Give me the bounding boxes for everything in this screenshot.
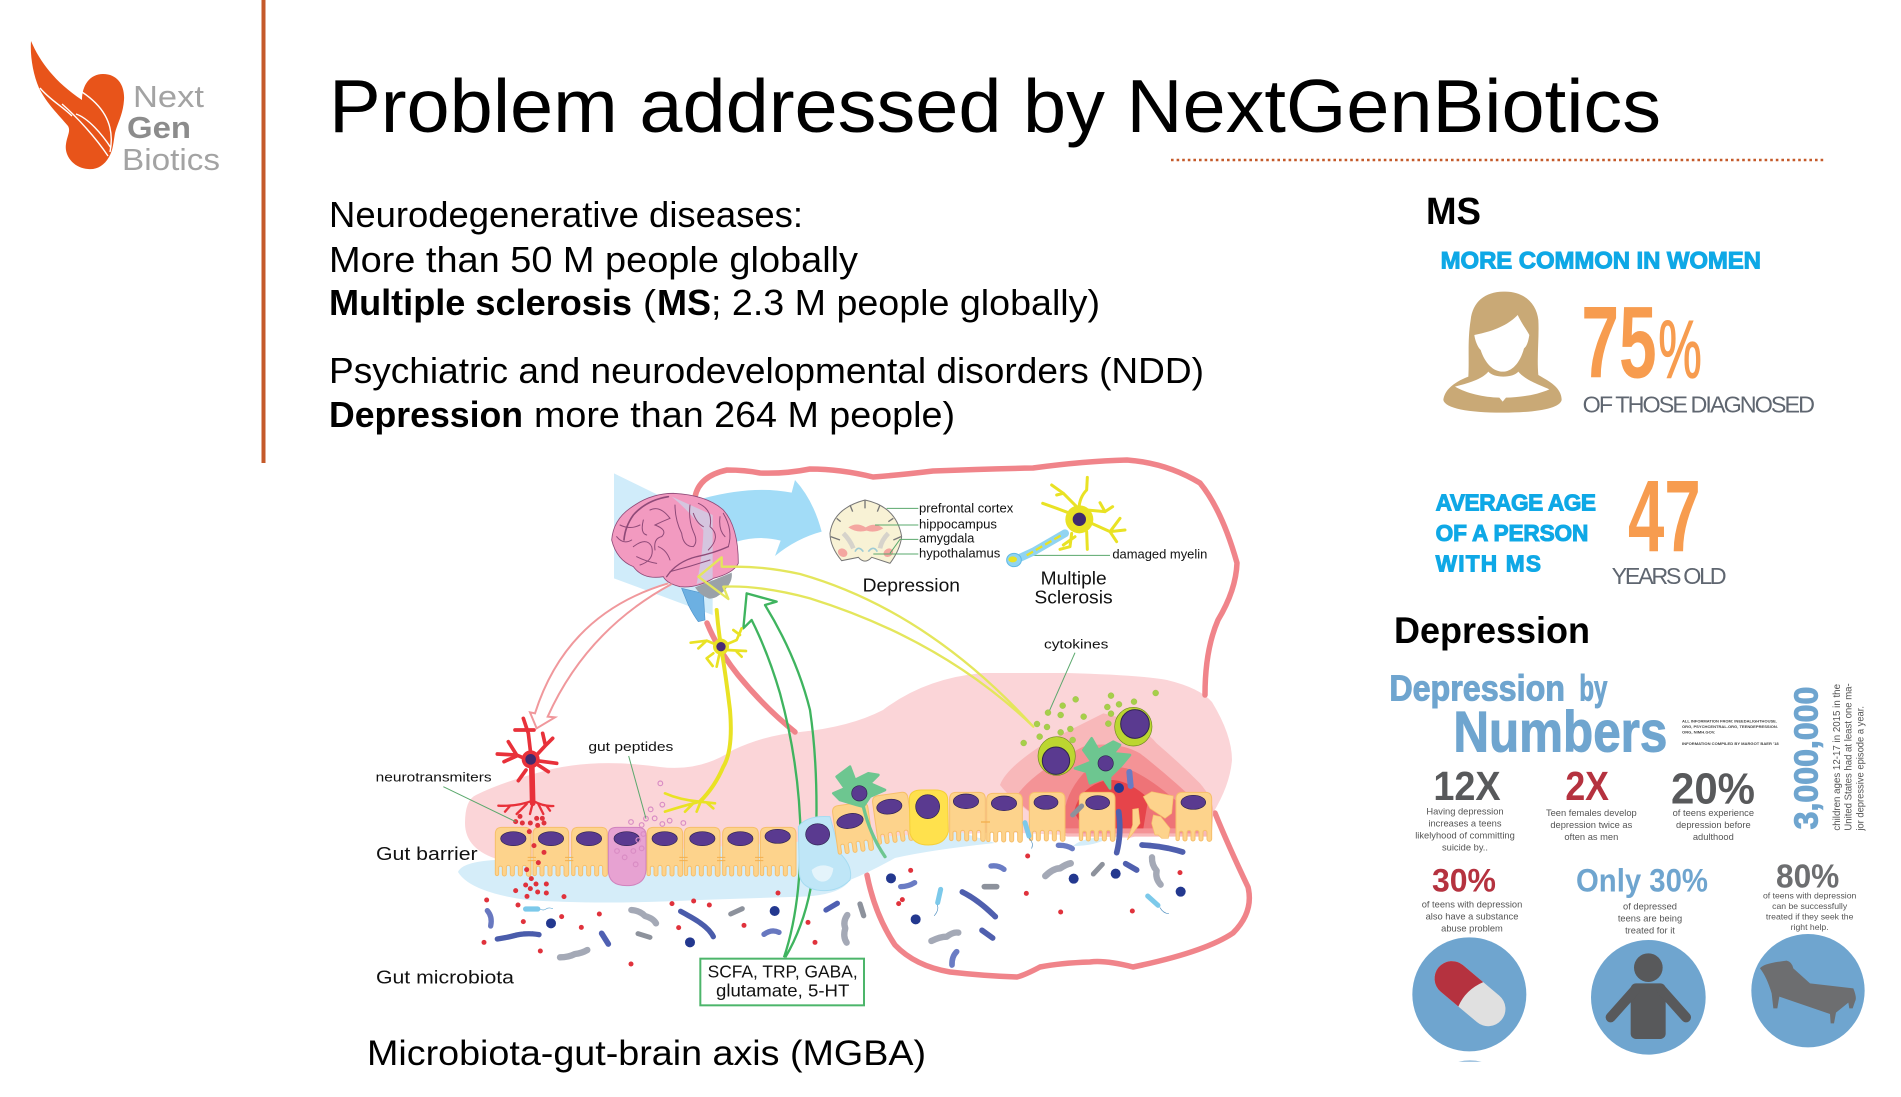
stat: 12X <box>1415 763 1515 852</box>
brain region labels: prefrontal cortex <box>919 502 1014 516</box>
pink lamina propria background <box>465 673 1232 860</box>
text block: disease burden: ( <box>643 282 656 323</box>
brain region labels <box>919 502 1014 561</box>
vertical stat: 3,000,000: 3,000,000 <box>1788 687 1825 829</box>
stat: 20%: of teens experience <box>1673 808 1754 818</box>
text block: disease burden <box>329 194 1204 435</box>
gut epithelium <box>376 718 864 1005</box>
stat: 12X: likelyhood of committing <box>1415 830 1515 840</box>
label: Gut microbiota: Gut microbiota <box>376 966 515 987</box>
stat: 30%: of teens with depression <box>1422 899 1522 909</box>
icon: damaged neuron <box>1007 477 1125 567</box>
epithelial cells left <box>495 827 796 886</box>
callout: metabolites box: SCFA, TRP, GABA, <box>708 961 858 981</box>
stat: 12X: Having depression <box>1426 806 1504 816</box>
icon: woman <box>1443 292 1562 413</box>
heading: Depression: Depression <box>1394 610 1590 651</box>
nuclei <box>501 829 790 846</box>
text block: disease burden: More than 50 M people globally <box>329 239 858 280</box>
label: gut peptides: gut peptides <box>588 739 674 754</box>
label: gut peptides <box>588 739 674 819</box>
average age label: AVERAGE AGE <box>1436 490 1596 516</box>
label lines <box>873 508 1110 555</box>
arrow: metabolites to brain (green) <box>743 593 817 957</box>
blue goblet cell <box>798 816 851 891</box>
text block: disease burden: Depression <box>329 394 523 435</box>
stat: 20%: adulthood <box>1693 832 1734 842</box>
stat: 20%: depression before <box>1676 820 1751 830</box>
icon: therapy couch <box>1751 934 1865 1047</box>
stat: 20% <box>1671 764 1755 842</box>
icon: person <box>1591 940 1706 1055</box>
sources note: ORG, PSYCHCENTRAL.ORG, TEENDEPRESSION. <box>1682 724 1778 729</box>
logo wordmark: Gen <box>127 110 191 145</box>
panel title: by <box>1579 669 1607 709</box>
icon: pill <box>1412 937 1526 1062</box>
label: damaged myelin: damaged myelin <box>1112 547 1207 561</box>
chart: microbiota-gut-brain axis diagram <box>376 460 1249 1005</box>
stat: 2X <box>1546 763 1637 842</box>
vertical stat: 3,000,000: children ages 12-17 in 2015 in the <box>1832 684 1843 831</box>
brain <box>612 473 738 622</box>
stat: 80%: right help. <box>1791 922 1829 932</box>
vertical stat: 3,000,000 <box>1788 683 1866 832</box>
text block: disease burden: more than 264 M people) <box>534 394 955 435</box>
logo: NextGenBiotics <box>31 41 220 177</box>
vertical stat: 3,000,000: jor depressive episode a year. <box>1855 706 1866 832</box>
stat: 80%: can be successfully <box>1772 901 1848 911</box>
caption: of those diagnosed: OF THOSE DIAGNOSED <box>1583 392 1815 418</box>
average age label <box>1436 490 1596 577</box>
stat: 80%: 80% <box>1776 858 1839 895</box>
stat: 80% <box>1763 858 1857 932</box>
logo wordmark: Next <box>133 79 204 114</box>
inflamed gut region <box>832 707 1213 965</box>
salmon body outline <box>695 460 1249 977</box>
stat: 30%: abuse problem <box>1441 923 1503 933</box>
text block: disease burden: Psychiatric and neurodevelopmental disorders (NDD) <box>329 350 1204 391</box>
text block: disease burden: ; 2.3 M people globally) <box>711 282 1100 323</box>
yellow vagal neuron <box>665 610 746 812</box>
sources note: ALL INFORMATION FROM: INEEDALIGHTHOUSE. <box>1682 719 1777 724</box>
panel: MS statistics <box>1436 248 1815 589</box>
label: Multiple Sclerosis: Multiple <box>1041 567 1107 588</box>
label: neurotransmiters <box>376 770 516 822</box>
sources note <box>1682 719 1779 746</box>
brain region labels: amygdala <box>919 532 975 546</box>
logo wordmark: Biotics <box>122 142 220 177</box>
stat: 30%: 30% <box>1432 863 1496 899</box>
callout: metabolites box <box>700 959 864 1005</box>
microglia / dendritic cells <box>833 738 1130 857</box>
sources note: ORG, NIMH.GOV. <box>1682 730 1715 735</box>
panel: Depression by Numbers <box>1389 669 1866 1062</box>
stat: Only 30%: of depressed <box>1623 901 1677 911</box>
gut peptide dots <box>615 781 686 867</box>
neurotransmitter dots <box>481 814 817 966</box>
brain section: depression <box>830 500 902 563</box>
brain region labels: hypothalamus <box>919 547 1000 561</box>
stat: Only 30% <box>1576 863 1708 936</box>
stat: 20%: 20% <box>1671 764 1755 813</box>
label: Depression: Depression <box>863 575 960 596</box>
stat: 75 percent: 75 <box>1581 285 1657 399</box>
stat: 75 percent: % <box>1658 304 1702 395</box>
gut microbes left <box>487 903 847 957</box>
stat: 30%: also have a substance <box>1426 911 1518 921</box>
immune cells <box>1038 707 1152 775</box>
icon: orange flame wing <box>31 41 124 169</box>
stat: 2X: Teen females develop <box>1546 808 1637 818</box>
stat: Only 30%: treated for it <box>1625 926 1675 936</box>
label: Multiple Sclerosis <box>1034 567 1113 608</box>
stat: 2X: often as men <box>1564 832 1618 842</box>
panel title: Numbers <box>1453 701 1667 765</box>
light blue mucus layer <box>458 832 995 902</box>
brain region labels: hippocampus <box>919 517 997 531</box>
MS stat heading: MORE COMMON IN WOMEN <box>1441 248 1761 275</box>
caption: Microbiota-gut-brain axis: Microbiota-gut-brain axis (MGBA) <box>367 1034 926 1073</box>
disease insets and cytokines <box>830 477 1207 746</box>
text block: disease burden: Multiple sclerosis <box>329 282 632 323</box>
heading: MS: MS <box>1426 191 1481 233</box>
label: cytokines <box>1044 637 1109 713</box>
inflammation gradient <box>1000 713 1213 837</box>
label: neurotransmiters: neurotransmiters <box>376 770 492 785</box>
panel title: Depression <box>1389 669 1565 709</box>
text block: disease burden: Neurodegenerative diseases: <box>329 194 803 235</box>
label: Gut barrier: Gut barrier <box>376 843 478 864</box>
stat: 80%: treated if they seek the <box>1766 912 1854 922</box>
callout: metabolites box: glutamate, 5-HT <box>716 981 849 1001</box>
caption: years old: YEARS OLD <box>1612 563 1727 589</box>
red enteric neuron <box>497 718 557 814</box>
title: Problem addressed by NextGenBiotics <box>329 64 1661 148</box>
arrow: cytokines to brain (yellow) <box>698 557 1033 727</box>
gut microbes right <box>860 772 1183 965</box>
stat: 2X: 2X <box>1565 763 1609 809</box>
average age label: WITH MS <box>1436 551 1541 577</box>
stat: 12X: suicide by.. <box>1442 842 1488 852</box>
stat: 80%: of teens with depression <box>1763 890 1857 900</box>
blue arrow: brain to disease <box>703 480 822 556</box>
average age label: OF A PERSON <box>1436 520 1588 546</box>
logo wordmark <box>122 79 220 177</box>
stat: 2X: depression twice as <box>1550 820 1633 830</box>
label: cytokines: cytokines <box>1044 637 1109 652</box>
cytokine dots <box>1021 690 1159 746</box>
epithelial cells right <box>832 790 1212 855</box>
panel title <box>1389 669 1667 765</box>
vertical stat: 3,000,000: United States had at least one ma- <box>1844 683 1855 831</box>
stat: Only 30%: Only 30% <box>1576 863 1708 899</box>
sources note: INFORMATION COMPILED BY MARGOT BAER '18 <box>1682 741 1779 746</box>
stat: 30% <box>1422 863 1522 933</box>
arrow: brain to enteric neuron (pink) <box>530 583 672 728</box>
label: Multiple Sclerosis: Sclerosis <box>1034 587 1113 608</box>
stat: 12X: increases a teens <box>1428 818 1502 828</box>
stat: Only 30%: teens are being <box>1618 914 1682 924</box>
stat: 47: 47 <box>1628 460 1701 574</box>
stat: 12X: 12X <box>1433 763 1501 809</box>
text block: disease burden: MS <box>657 282 711 323</box>
